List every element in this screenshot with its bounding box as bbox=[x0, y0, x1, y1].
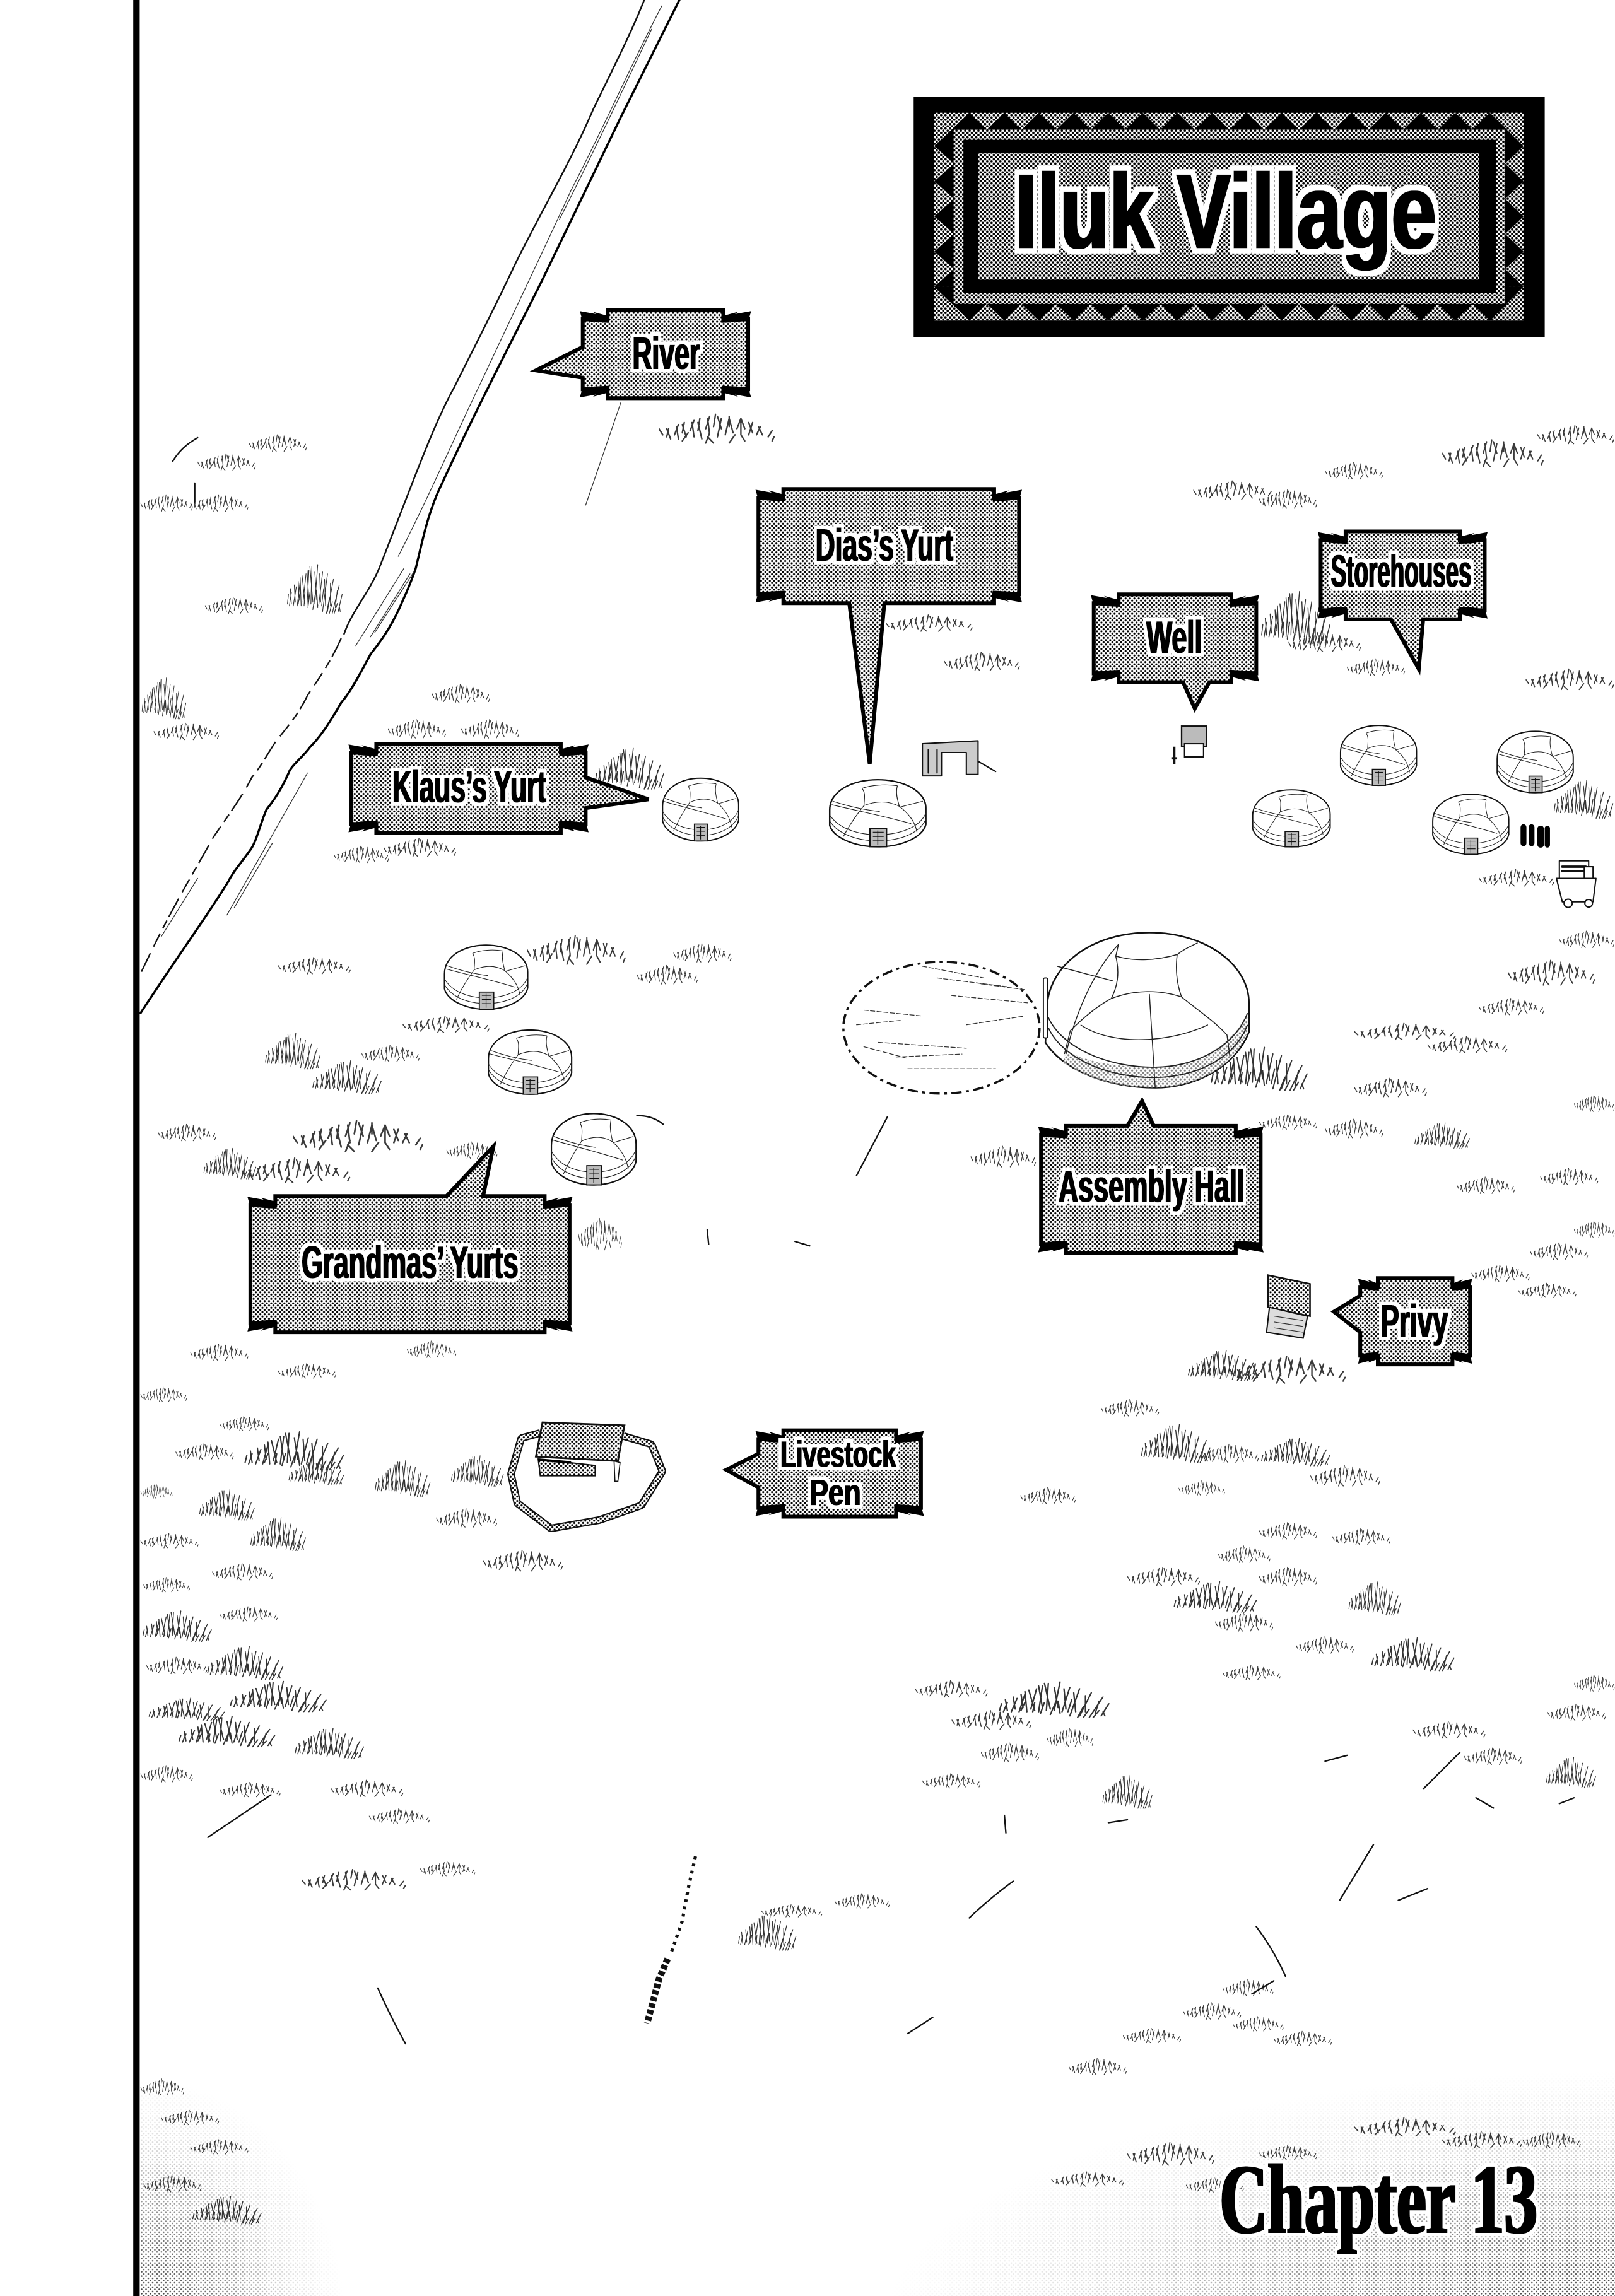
distant dark trail marks bbox=[647, 1856, 695, 2024]
bottom stipple shading bbox=[141, 2087, 1615, 2296]
assembly hall bbox=[1043, 932, 1249, 1087]
callout: Dias's Yurt: Dias’s Yurt bbox=[816, 520, 953, 571]
yurt: Klaus bbox=[662, 778, 739, 841]
callout: Livestock Pen: Pen bbox=[809, 1472, 861, 1513]
well bbox=[1172, 726, 1206, 764]
grass tufts: lower-left field bbox=[141, 1341, 890, 2224]
callout: Dias's Yurt bbox=[756, 489, 1022, 764]
river bank sketch line bbox=[585, 402, 621, 505]
callout: Livestock Pen bbox=[726, 1431, 924, 1517]
privy bbox=[1267, 1275, 1310, 1338]
storehouse cart bbox=[1556, 861, 1596, 908]
callout: Klaus's Yurt bbox=[348, 744, 649, 833]
river bbox=[141, 0, 679, 1013]
callout: Livestock Pen: Livestock bbox=[780, 1434, 896, 1475]
callout: Storehouses bbox=[1318, 532, 1488, 669]
yurt: Dias bbox=[830, 780, 926, 846]
callout: River: River bbox=[633, 329, 700, 379]
callout: Assembly Hall: Assembly Hall bbox=[1059, 1162, 1245, 1212]
open yard: dashed circle bbox=[843, 962, 1040, 1094]
livestock pen bbox=[511, 1422, 662, 1528]
ink scratch marks bbox=[173, 438, 1574, 2044]
callout: River bbox=[536, 310, 751, 398]
callout: Grandmas' Yurts bbox=[247, 1146, 572, 1332]
callout: Privy: Privy bbox=[1381, 1296, 1448, 1347]
grass tufts: upper field bbox=[141, 414, 1614, 1250]
callout: Klaus's Yurt: Klaus’s Yurt bbox=[392, 762, 546, 812]
yurts: east cluster bbox=[1253, 725, 1573, 854]
callout: Well: Well bbox=[1146, 612, 1202, 663]
grass tufts: right field bbox=[915, 1023, 1614, 2192]
callout: Assembly Hall bbox=[1038, 1101, 1264, 1253]
yurts: grandmas bbox=[445, 945, 636, 1185]
title plaque: Iluk Village bbox=[913, 97, 1545, 337]
title text: Iluk Village bbox=[1014, 151, 1436, 271]
left page border bar bbox=[133, 0, 139, 2296]
shed near Dias's yurt bbox=[922, 741, 995, 776]
callout: Privy bbox=[1334, 1278, 1472, 1364]
people by storehouses bbox=[1520, 824, 1550, 848]
callout: Well bbox=[1091, 594, 1259, 708]
callout: Grandmas' Yurts: Grandmas’ Yurts bbox=[302, 1238, 519, 1288]
callout: Storehouses: Storehouses bbox=[1331, 547, 1472, 597]
